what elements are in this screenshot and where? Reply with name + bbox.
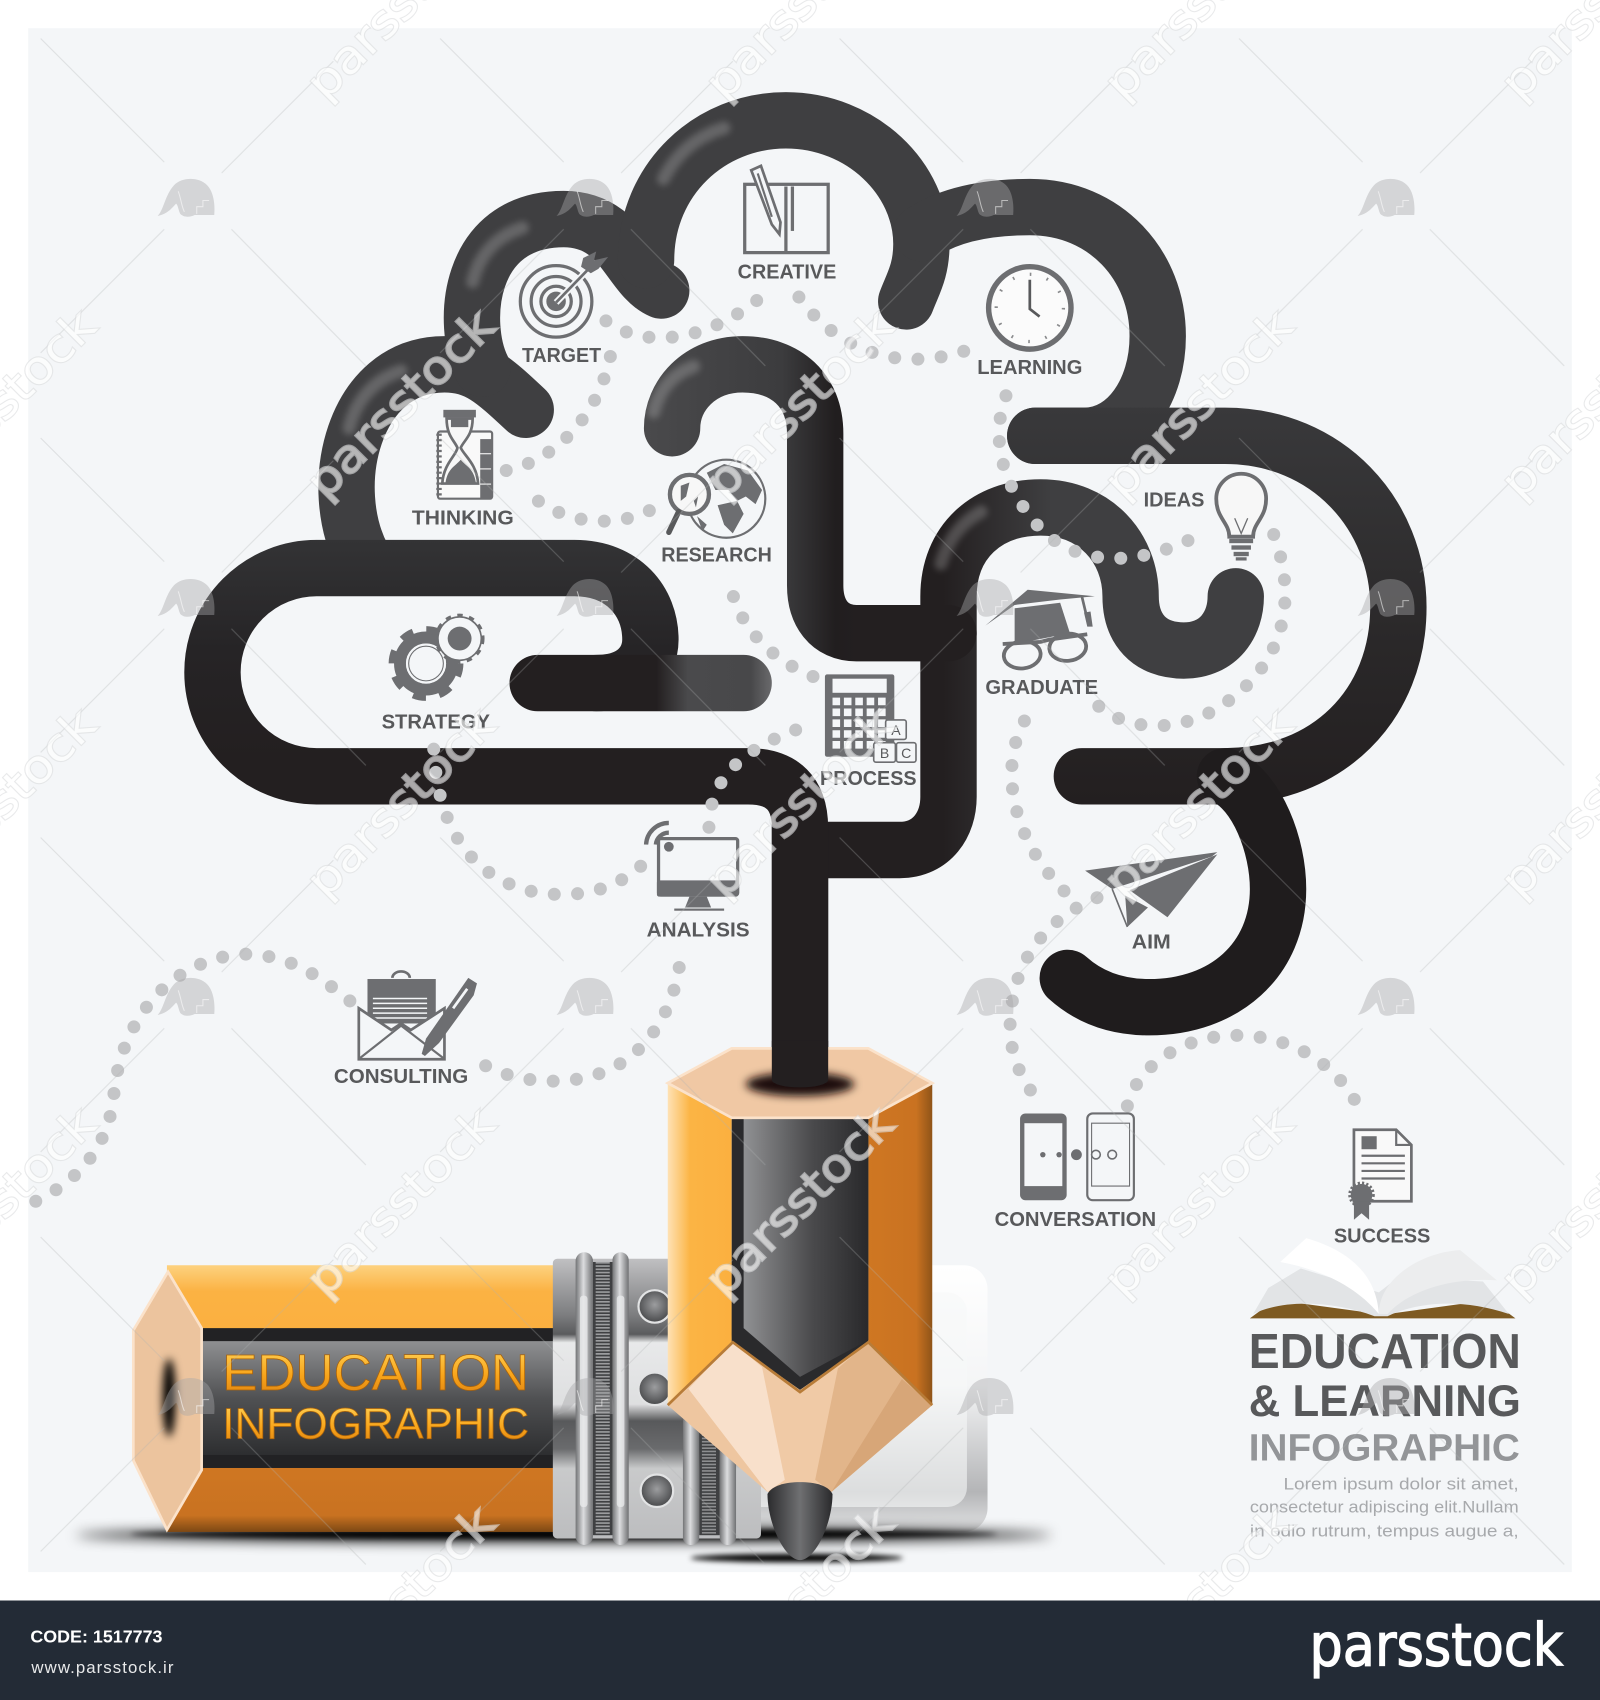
watermark text: parsstock [1093,1495,1304,1700]
label: analysis: ANALYSIS [647,919,750,942]
book cover [1250,1300,1515,1318]
watermark elephants [158,179,1415,1416]
label: thinking: THINKING [412,507,514,530]
watermark text: parsstock [1093,298,1304,509]
wood cone [668,1342,932,1492]
label: aim: AIM [1132,931,1171,954]
pencil end lead [163,1358,176,1437]
dotted learning path [36,292,1364,1201]
icon: certificate with ribbon [1334,1130,1430,1247]
icon: calculator with blocks: C [901,745,911,761]
label: creative: CREATIVE [738,261,836,284]
icon: calculator with blocks: A [891,722,901,738]
brain lobe: top left [347,364,526,558]
pencil end hexagon [133,1272,202,1530]
horizontal pencil [133,1252,761,1545]
pencil line trunk [774,824,826,1084]
label: ideas: IDEAS [1144,488,1204,511]
brain bar [538,657,744,709]
icon: globe and magnifier [661,460,772,567]
watermark text: parsstock [296,697,506,908]
brain tree made of pencil line [212,120,1398,1084]
icon: calculator with blocks [820,674,917,790]
pencil title text: EDUCATION [222,1344,529,1401]
pencil upper face [167,1265,555,1330]
pencil lower face [167,1466,555,1532]
metal ferrule [553,1252,761,1545]
heading: infographic: INFOGRAPHIC [1249,1427,1520,1469]
footer bar [0,1600,1600,1700]
brain lobe: bottom right [1068,776,1278,1007]
book pages stack [1253,1268,1509,1316]
label: success: SUCCESS [1334,1224,1430,1247]
lorem text line 2: consectetur adipiscing elit.Nullam [1250,1497,1519,1516]
icon: light bulb [1144,474,1266,561]
top lead hole [746,1072,854,1096]
shadow under horizontal pencil [76,1529,1051,1542]
heading block [1249,1325,1521,1540]
footer url: www.parsstock.ir [30,1658,174,1677]
icon: envelope and pen [334,971,477,1088]
watermark text: parsstock [296,1495,506,1700]
brain branch: centre right arch [800,507,1236,850]
watermark text: parsstock [694,1495,905,1700]
watermark text: parsstock [694,298,905,509]
brain lobe: left loop [212,568,800,1084]
centre face sheen [744,1118,868,1377]
watermark text: parsstock [1093,697,1304,908]
lorem text line 3: in odio rutrum, tempus augue a, [1250,1521,1519,1540]
watermark text: parsstock [694,1096,905,1307]
label: learning: LEARNING [977,356,1082,379]
brain branch: centre hook [672,364,949,633]
open book [1250,1238,1515,1318]
icon: clock [977,267,1082,379]
heading: education: EDUCATION [1249,1325,1521,1379]
lorem text line 1: Lorem ipsum dolor sit amet, [1283,1475,1519,1494]
icon: book and pen [738,166,836,284]
brain lobe: crown [646,120,921,301]
right page [1379,1250,1497,1314]
icon: graduation cap and glasses [985,590,1098,699]
label: strategy: STRATEGY [382,711,490,734]
left page [1280,1238,1379,1314]
brain lobe: upper left [472,219,661,369]
label: process: PROCESS [820,767,917,790]
footer code: CODE: 1517773 [30,1627,163,1647]
footer logo: parsstock [1309,1611,1563,1679]
icon: gears [382,615,490,734]
watermark text: parsstock [296,1096,506,1307]
icon: two smartphones [995,1113,1156,1231]
right face [868,1083,932,1405]
vertical pencil [668,1041,932,1560]
icon: calculator with blocks: B [880,745,889,761]
heading: and learning: & LEARNING [1249,1377,1521,1426]
watermark text: parsstock [694,697,905,908]
eraser block behind pencil [737,1265,988,1532]
label: consulting: CONSULTING [334,1065,468,1088]
brain lobe: upper right [921,207,1158,436]
label: research: RESEARCH [661,544,772,567]
watermark text: parsstock [296,298,506,509]
icon: monitor with wifi [646,823,750,942]
dark centre face [732,1118,868,1392]
label: conversation: CONVERSATION [995,1208,1156,1231]
band sheen [202,1341,555,1455]
gloss highlights [349,128,981,564]
pencil lead tip [767,1482,833,1560]
icon: notebook and hourglass [412,410,514,530]
label: graduate: GRADUATE [985,676,1098,699]
brain lobe: big right [1035,436,1398,776]
icon: target with arrow [520,252,608,367]
pencil subtitle text: INFOGRAPHIC [222,1401,529,1449]
left face [668,1083,732,1405]
pencil dark band [202,1328,555,1468]
top hexagon [668,1048,932,1118]
pencil line emerging [772,1041,828,1087]
label: target: TARGET [522,344,601,367]
watermark text: parsstock [1093,1096,1304,1307]
icon: paper plane [1085,852,1217,954]
shadow under pencil tip [691,1554,903,1562]
